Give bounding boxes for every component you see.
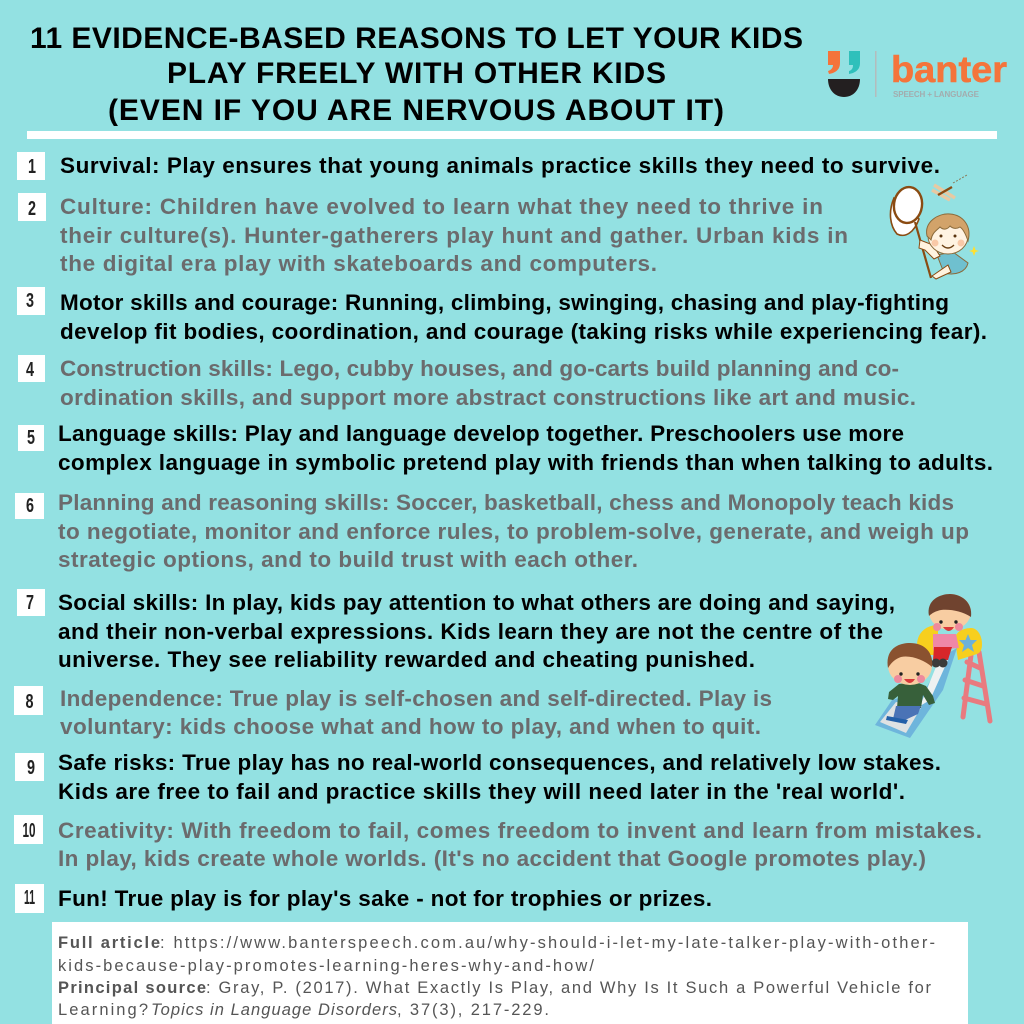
title [30,22,803,127]
item 9: safe risks: 9 [27,757,35,779]
item 10: creativity: 10 [22,820,36,842]
item 8: independence: voluntary: kids choose what and how to play, and when to quit. [60,714,761,739]
item 5: language skills: 5 [27,427,35,449]
item 10: creativity: Creativity: With freedom to fail, comes freedom to invent and learn from mistakes. [58,818,982,843]
item 4: construction skills: 4 [26,359,35,381]
item 8: independence: 8 [26,691,34,713]
title: PLAY FREELY WITH OTHER KIDS [167,57,666,90]
item 2: culture: Culture: Children have evolved to learn what they need to thrive in [60,194,823,219]
item 11: fun: Fun! True play is for play's sake - not for trophies or prizes. [58,886,712,911]
item 6: planning and reasoning skills: strategic options, and to build trust with each other. [58,547,638,572]
item 3: motor skills and courage: develop fit bodies, coordination, and courage (taking risks while experiencing fear). [60,319,987,344]
title: 11 EVIDENCE-BASED REASONS TO LET YOUR KIDS [30,22,803,55]
footer: article link and principal source: Learning? [58,1001,148,1019]
item 3: motor skills and courage [17,287,987,344]
item 9: safe risks: Kids are free to fail and practice skills they will need later in the 'real world'. [58,779,905,804]
footer: article link and principal source [52,922,968,1024]
item 10: creativity [14,815,982,871]
icon: two children on a slide [875,594,990,738]
item 4: construction skills [18,355,916,410]
logo: banter speech and language [828,49,1007,99]
item 11: fun: 11 [24,887,35,909]
item 3: motor skills and courage: 3 [26,290,34,312]
item 7: social skills [17,589,895,672]
footer: article link and principal source: kids-because-play-promotes-learning-heres-why-and-how/ [58,957,594,975]
item 7: social skills: Social skills: In play, kids pay attention to what others are doing and saying, [58,590,895,615]
item 4: construction skills: ordination skills, and support more abstract constructions like art and music. [60,385,916,410]
white divider bar [27,131,997,139]
item 1: survival: Survival: Play ensures that young animals practice skills they need to survive. [60,153,940,178]
item 8: independence: Independence: True play is self-chosen and self-directed. Play is [60,686,772,711]
item 4: construction skills: Construction skills: Lego, cubby houses, and go-carts build planning and co- [60,356,899,381]
item 7: social skills: universe. They see reliability rewarded and cheating punished. [58,647,755,672]
logo: banter speech and language: SPEECH + LANGUAGE [893,90,980,99]
item 6: planning and reasoning skills: Planning and reasoning skills: Soccer, basketball, chess and Monopoly teach kids [58,490,954,515]
item 6: planning and reasoning skills [15,490,969,572]
item 6: planning and reasoning skills: 6 [26,495,34,517]
footer: article link and principal source: Principal source [58,979,206,997]
item 9: safe risks [15,750,941,804]
item 7: social skills: and their non-verbal expressions. Kids learn they are not the centre of the [58,619,883,644]
item 5: language skills [18,421,993,475]
item 7: social skills: 7 [26,592,34,614]
item 2: culture: their culture(s). Hunter-gatherers play hunt and gather. Urban kids in [60,223,848,248]
footer: article link and principal source: : https://www.banterspeech.com.au/why-should-i-let-my-late-talker-play-with-other- [160,934,935,952]
item 5: language skills: Language skills: Play and language develop together. Preschoolers use more [58,421,904,446]
footer: article link and principal source: Full article [58,934,160,952]
icon: child with butterfly net chasing a dragonfly [890,175,979,279]
item 10: creativity: In play, kids create whole worlds. (It's no accident that Google promotes play.) [58,846,926,871]
item 3: motor skills and courage: Motor skills and courage: Running, climbing, swinging, chasing and play-fighting [60,290,949,315]
footer: article link and principal source: : Gray, P. (2017). What Exactly Is Play, and Why Is It Such a Powerful Vehicle for [206,979,932,997]
logo: banter speech and language: banter [891,49,1007,90]
footer: article link and principal source: , 37(3), 217-229. [397,1001,549,1019]
item 2: culture [18,193,848,276]
item 2: culture: the digital era play with skateboards and computers. [60,251,657,276]
item 5: language skills: complex language in symbolic pretend play with friends than when talking to adults. [58,450,993,475]
title: (EVEN IF YOU ARE NERVOUS ABOUT IT) [108,94,724,127]
item 6: planning and reasoning skills: to negotiate, monitor and enforce rules, to problem-solve, generate, and weigh up [58,519,969,544]
item 2: culture: 2 [28,198,36,220]
footer: article link and principal source: Topics in Language Disorders [151,1001,397,1019]
item 9: safe risks: Safe risks: True play has no real-world consequences, and relatively low stakes. [58,750,941,775]
item 1: survival: 1 [28,156,36,178]
item 8: independence [14,686,772,739]
